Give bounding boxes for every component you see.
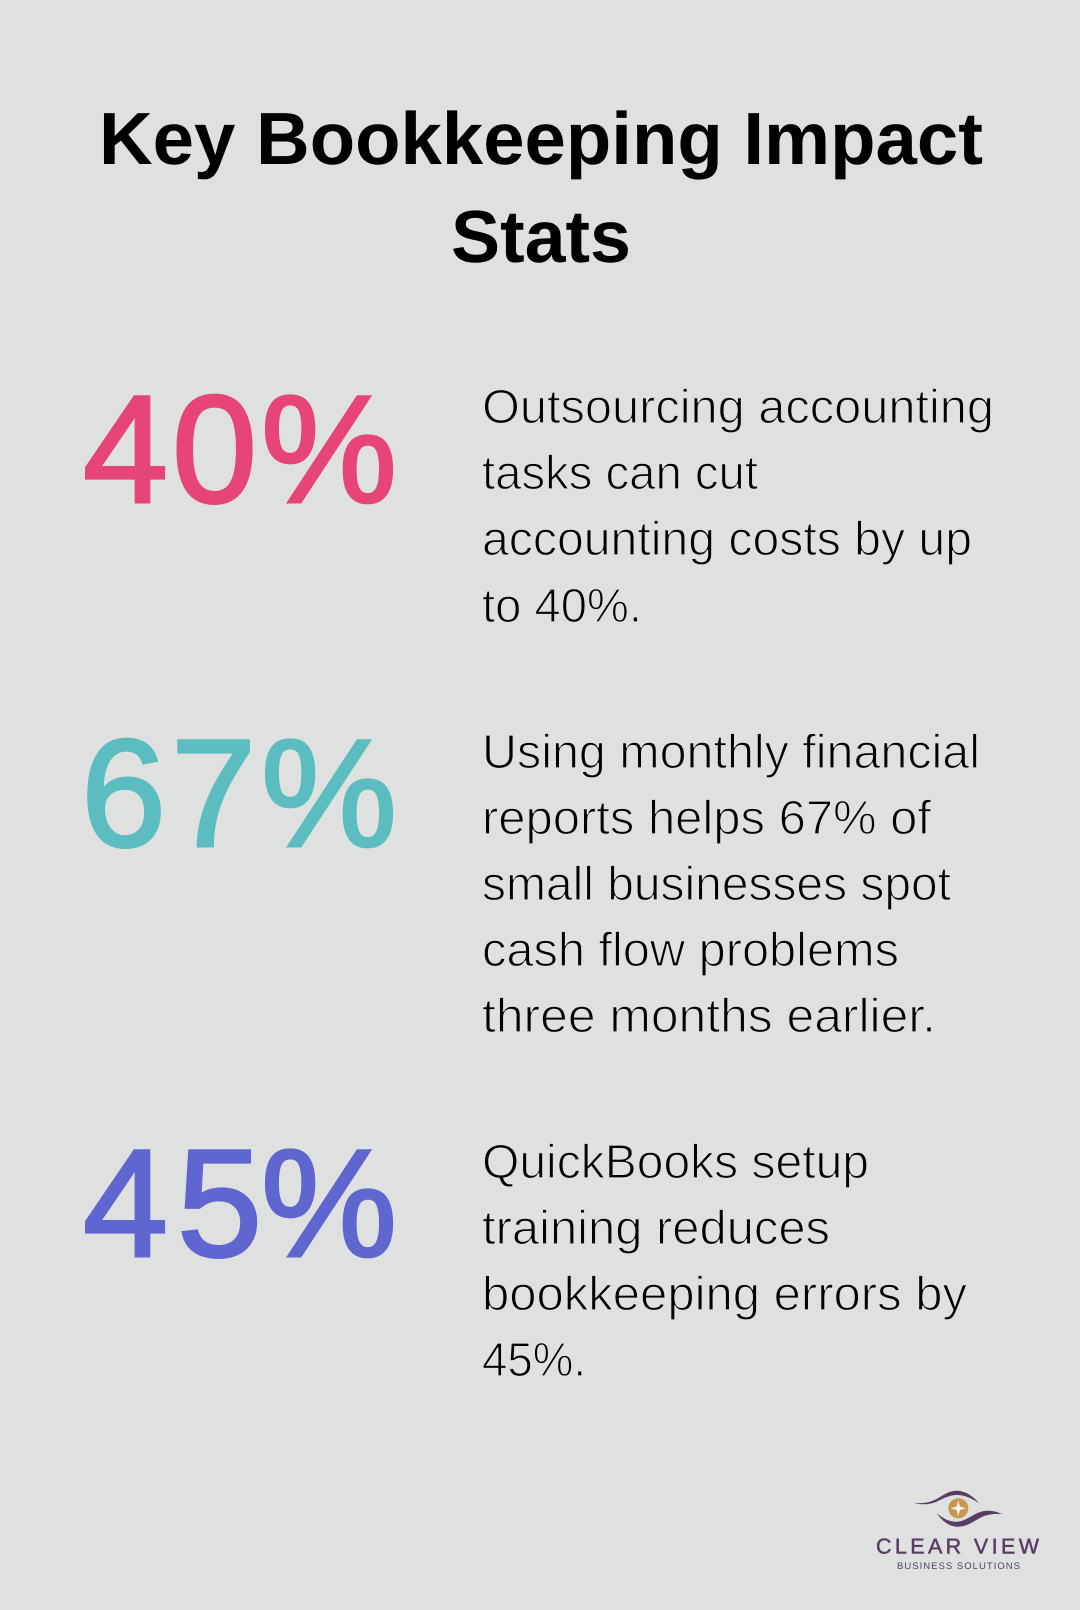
panel: stat 67%: [81, 708, 980, 1043]
description: outsourcing: to 40%.: [482, 580, 642, 633]
description: outsourcing: accounting costs by up: [482, 513, 972, 566]
description: monthly reports: Using monthly financial: [482, 726, 980, 779]
description: monthly reports: three months earlier.: [482, 990, 936, 1043]
logo wordmark: CLEAR VIEW: [876, 1534, 1040, 1558]
panel: stat 45%: [83, 1118, 967, 1387]
description: QuickBooks training: 45%.: [482, 1334, 586, 1387]
description: outsourcing: Outsourcing accounting: [482, 381, 994, 434]
description: monthly reports: small businesses spot: [482, 858, 951, 911]
title: Key Bookkeeping Impact: [99, 97, 983, 180]
description: outsourcing: [482, 381, 994, 633]
description: monthly reports: reports helps 67% of: [482, 792, 932, 845]
stat number: 40%: 40%: [83, 364, 397, 535]
title: Stats: [451, 195, 631, 278]
stat number: 45%: 45%: [83, 1118, 397, 1289]
description: outsourcing: tasks can cut: [482, 447, 758, 500]
title: [99, 97, 983, 278]
description: monthly reports: [482, 726, 980, 1043]
description: QuickBooks training: training reduces: [482, 1202, 830, 1255]
icon: eye with star: [914, 1491, 1002, 1527]
description: QuickBooks training: QuickBooks setup: [482, 1136, 869, 1189]
stat number: 67%: 67%: [81, 708, 397, 879]
panel: stat 40%: [83, 364, 994, 633]
description: QuickBooks training: bookkeeping errors by: [482, 1268, 967, 1321]
description: monthly reports: cash flow problems: [482, 924, 899, 977]
logo: Clear View Business Solutions: [876, 1491, 1040, 1572]
logo tagline: BUSINESS SOLUTIONS: [897, 1561, 1020, 1572]
description: QuickBooks training: [482, 1136, 967, 1387]
